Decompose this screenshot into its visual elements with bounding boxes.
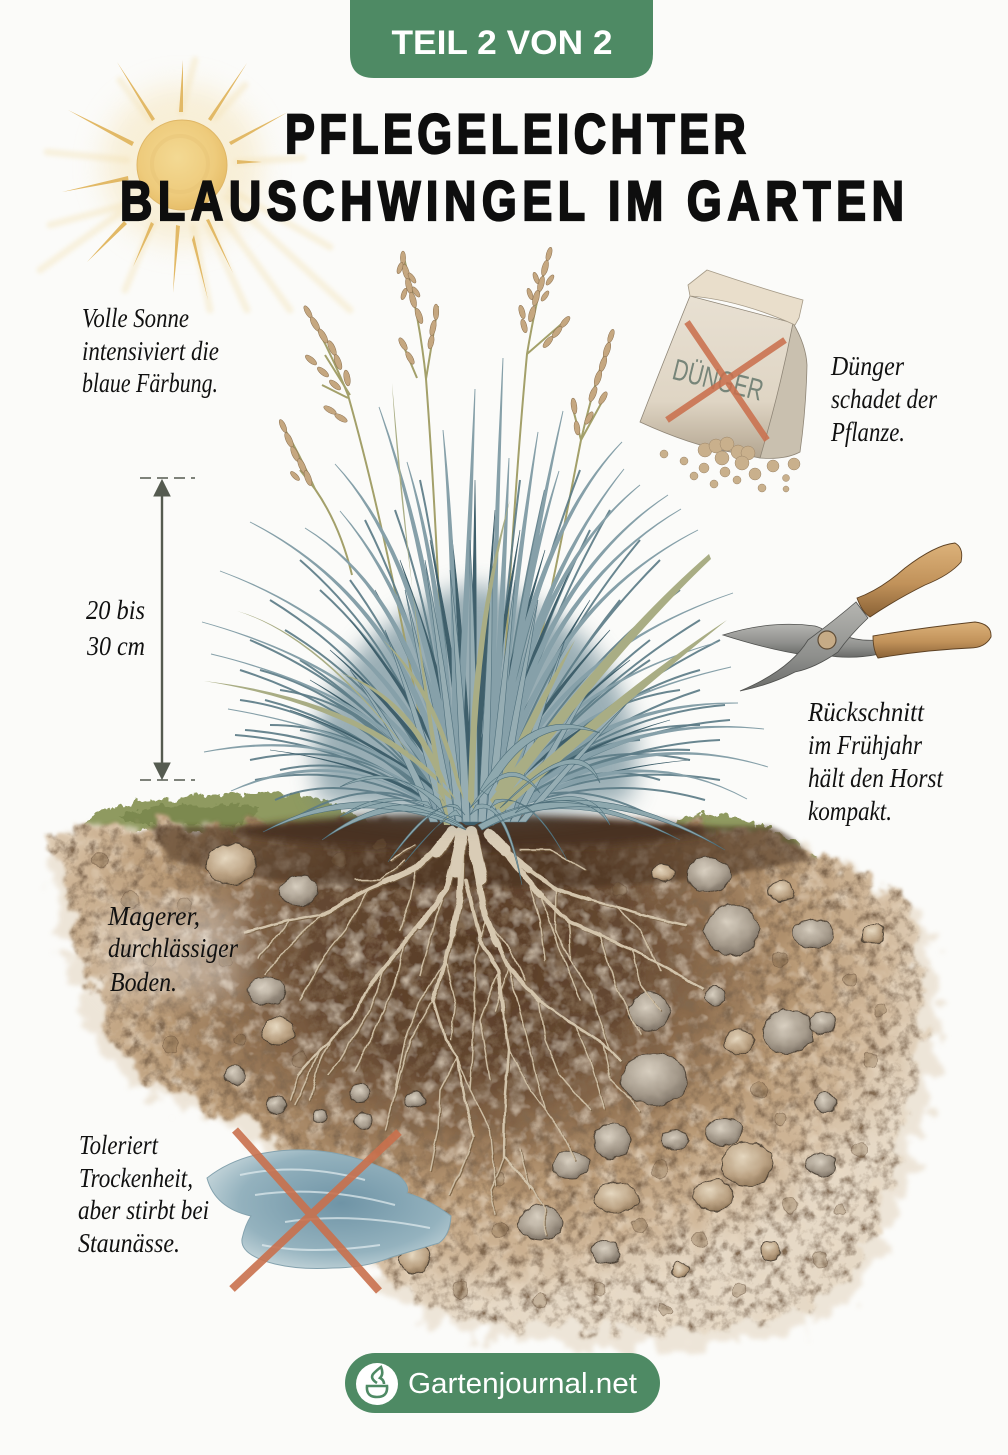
text: waterlogging note: Staunässe.	[78, 1228, 180, 1258]
main soil body	[48, 826, 921, 1332]
roots	[245, 832, 703, 1235]
puddle	[207, 1150, 451, 1268]
text: pruning note	[807, 697, 944, 826]
rocks in the soil	[206, 844, 885, 1278]
text: height: 20 bis	[86, 595, 145, 625]
seed heads	[278, 247, 616, 487]
title: BLAUSCHWINGEL IM GARTEN	[120, 169, 904, 232]
height arrow	[140, 478, 195, 780]
front drooping blades	[263, 724, 725, 885]
red cross	[667, 322, 785, 440]
mid blades	[202, 358, 768, 825]
soil cross-section	[48, 814, 940, 1347]
icon: fertilizer bag crossed out	[640, 270, 807, 492]
header badge: TEIL 2 VON 2	[392, 24, 612, 62]
pale broad central blades	[350, 540, 630, 822]
text: soil note: Magerer,	[107, 901, 200, 931]
text: soil note: durchlässiger	[108, 933, 238, 963]
text: pruning note: im Frühjahr	[808, 730, 922, 760]
text: height: 30 cm	[86, 631, 145, 661]
fertilizer pellets	[660, 437, 800, 492]
icon: sun with rays	[40, 60, 350, 310]
text: fertilizer note: Dünger	[830, 351, 904, 381]
text: waterlogging note: Toleriert	[79, 1130, 159, 1160]
red cross	[232, 1130, 399, 1291]
title: PFLEGELEICHTER	[285, 102, 746, 165]
bag front panel	[640, 296, 793, 458]
text: soil note: Boden.	[110, 967, 177, 997]
seed stems	[283, 254, 611, 720]
icon: pruning shears	[723, 543, 991, 691]
ground moss	[78, 793, 830, 868]
text: height	[86, 595, 145, 661]
grass core shadow	[314, 585, 637, 815]
dark topsoil band	[150, 826, 810, 887]
icon: logo	[356, 1363, 398, 1405]
text: waterlogging note: Trockenheit,	[79, 1163, 193, 1193]
text: fertilizer note	[830, 351, 937, 447]
text: pruning note: Rückschnitt	[807, 697, 925, 727]
text: waterlogging note	[78, 1130, 209, 1258]
upper wooden handle	[857, 543, 962, 617]
text: waterlogging note: aber stirbt bei	[78, 1195, 209, 1225]
pivot bolt	[818, 631, 836, 649]
text: fertilizer note: schadet der	[831, 384, 937, 414]
lower wooden handle	[873, 622, 991, 658]
scattered pebbles	[93, 839, 886, 1316]
text: pruning note: kompakt.	[808, 796, 892, 826]
text: sun note: blaue Färbung.	[82, 368, 218, 398]
bag label: DÜNGER	[669, 353, 767, 408]
text: sun note: intensiviert die	[82, 336, 219, 366]
bag side panel	[760, 323, 807, 458]
text: pruning note: hält den Horst	[808, 763, 944, 793]
lower blade and upper tang	[740, 602, 868, 691]
bag folded top	[688, 270, 803, 325]
header badge	[350, 0, 653, 78]
text: fertilizer note: Pflanze.	[830, 417, 905, 447]
water ripples	[240, 1170, 430, 1250]
pale soil wash	[55, 832, 940, 1347]
blue fescue grass	[202, 247, 768, 885]
dark blades	[270, 480, 690, 825]
lower handle tang	[825, 630, 880, 657]
text: sun note: Volle Sonne	[82, 303, 189, 333]
thin outer dark blades	[235, 470, 730, 820]
text: sun note	[82, 303, 219, 398]
icon: puddle crossed out	[207, 1130, 451, 1291]
olive blades	[204, 383, 727, 825]
text: soil note	[105, 901, 240, 997]
footer brand pill	[345, 1353, 660, 1413]
title	[120, 102, 904, 232]
upper blade	[723, 624, 827, 655]
soil strip under grass	[230, 814, 720, 848]
footer brand pill: Gartenjournal.net	[408, 1368, 637, 1400]
